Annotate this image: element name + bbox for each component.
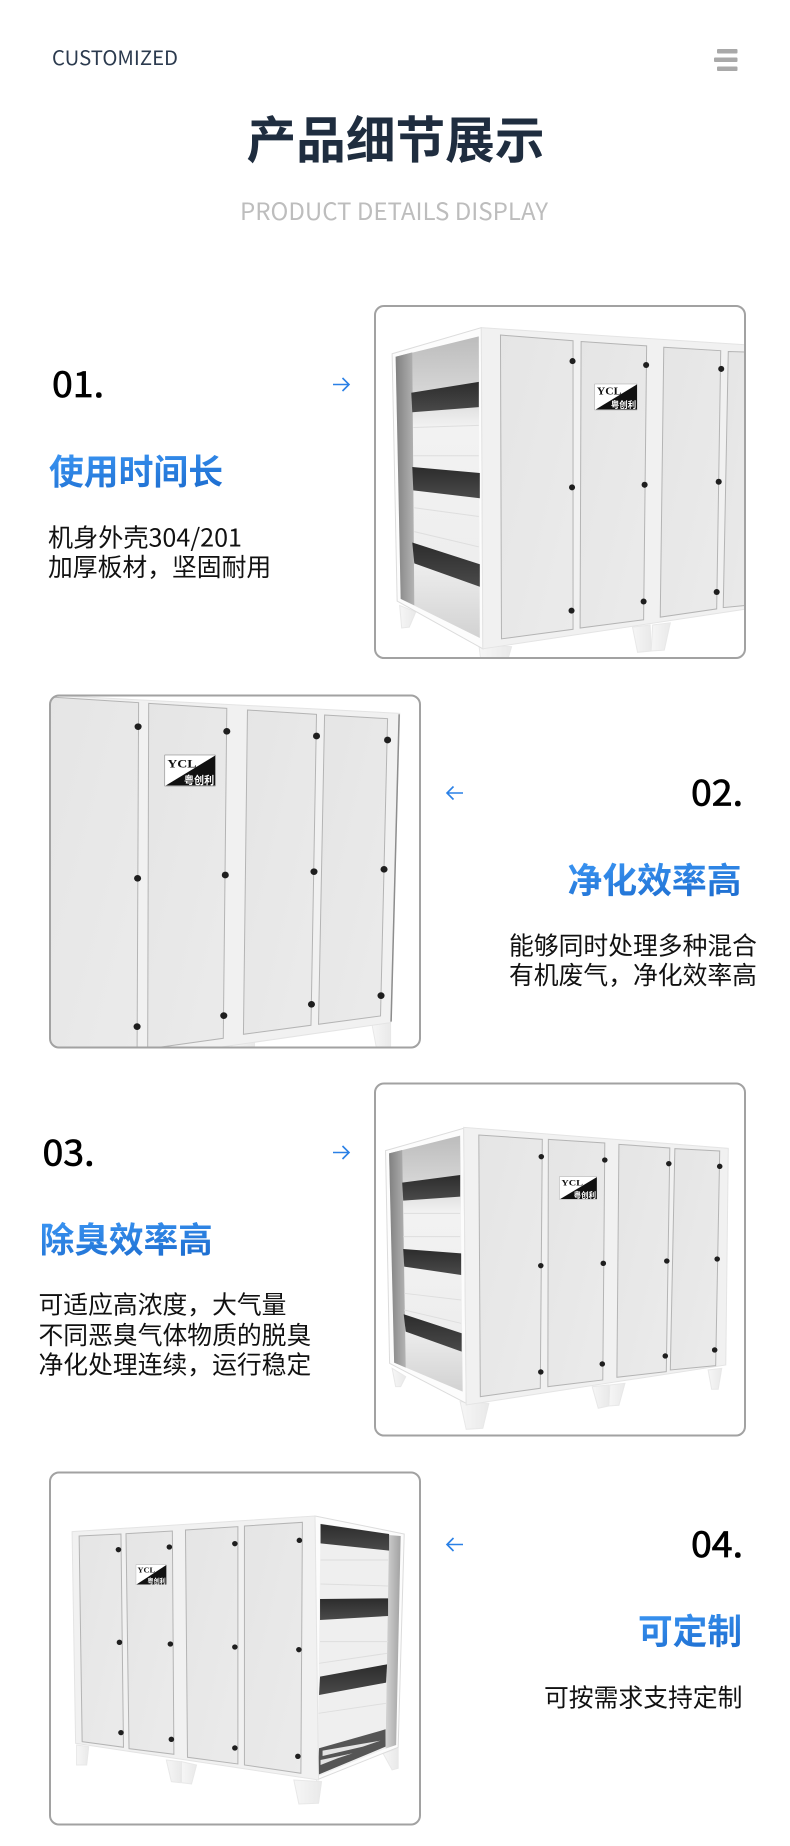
- description 02: [509, 927, 757, 992]
- heading: deodorization efficiency: 除臭效率高: [40, 1212, 213, 1264]
- cabinet drawing 04: [72, 1516, 404, 1804]
- header label: CUSTOMIZED: [52, 42, 178, 71]
- description 01: 机身外壳304/201: [48, 518, 242, 554]
- description 02: 能够同时处理多种混合: [509, 927, 757, 963]
- number 02: 02.: [691, 766, 743, 816]
- logo plate 03: [560, 1177, 597, 1201]
- description 03: 不同恶臭气体物质的脱臭: [38, 1316, 311, 1352]
- description 02: 有机废气，净化效率高: [509, 956, 757, 992]
- panel: feature 03 text: [38, 1125, 349, 1382]
- logo plate 02: [165, 755, 215, 788]
- panel: product photo 02: [45, 695, 420, 1051]
- logo plate 04: [136, 1565, 166, 1585]
- panel: product photo 04: [50, 1472, 420, 1824]
- number 04: 04.: [691, 1517, 743, 1568]
- logo plate 03: 粤创利: [574, 1190, 596, 1201]
- description 03: 净化处理连续，运行稳定: [38, 1346, 311, 1382]
- logo plate 03: YCL: [561, 1178, 583, 1188]
- panel: feature 01 text: [48, 357, 349, 584]
- panel: product photo 01: [375, 306, 759, 664]
- logo plate 01: [595, 384, 637, 411]
- panel: feature 04 text: [447, 1517, 743, 1714]
- description 03: 可适应高浓度，大气量: [38, 1286, 286, 1322]
- logo plate 02: 粤创利: [184, 773, 214, 788]
- title: 产品细节展示: [246, 101, 544, 173]
- arrow: right: [333, 378, 349, 391]
- panel: feature 02 text: [447, 766, 757, 992]
- description 03: [38, 1286, 311, 1382]
- cabinet drawing 01: [392, 328, 759, 664]
- logo plate 01: 粤创利: [611, 398, 636, 411]
- logo plate 02: YCL: [167, 757, 197, 770]
- subtitle: PRODUCT DETAILS DISPLAY: [240, 192, 548, 227]
- logo plate 01: YCL: [597, 386, 622, 397]
- heading: long service life: 使用时间长: [49, 444, 223, 496]
- cabinet drawing 03: [386, 1127, 728, 1429]
- logo plate 04: 粤创利: [148, 1575, 166, 1585]
- heading: purification efficiency: 净化效率高: [568, 853, 742, 904]
- panel: product photo 03: [375, 1084, 745, 1436]
- arrow: right: [333, 1146, 349, 1159]
- arrow: left: [447, 786, 463, 800]
- logo plate 04: YCL: [138, 1565, 155, 1575]
- number 03: 03.: [42, 1125, 94, 1176]
- description 04: 可按需求支持定制: [544, 1678, 742, 1714]
- icon: menu bars: [714, 49, 738, 71]
- description 01: [48, 518, 271, 584]
- number 01: 01.: [52, 357, 104, 408]
- cabinet drawing 02: [45, 695, 400, 1051]
- description 01: 加厚板材，坚固耐用: [48, 548, 271, 584]
- arrow: left: [447, 1538, 463, 1551]
- heading: customizable: 可定制: [638, 1604, 742, 1655]
